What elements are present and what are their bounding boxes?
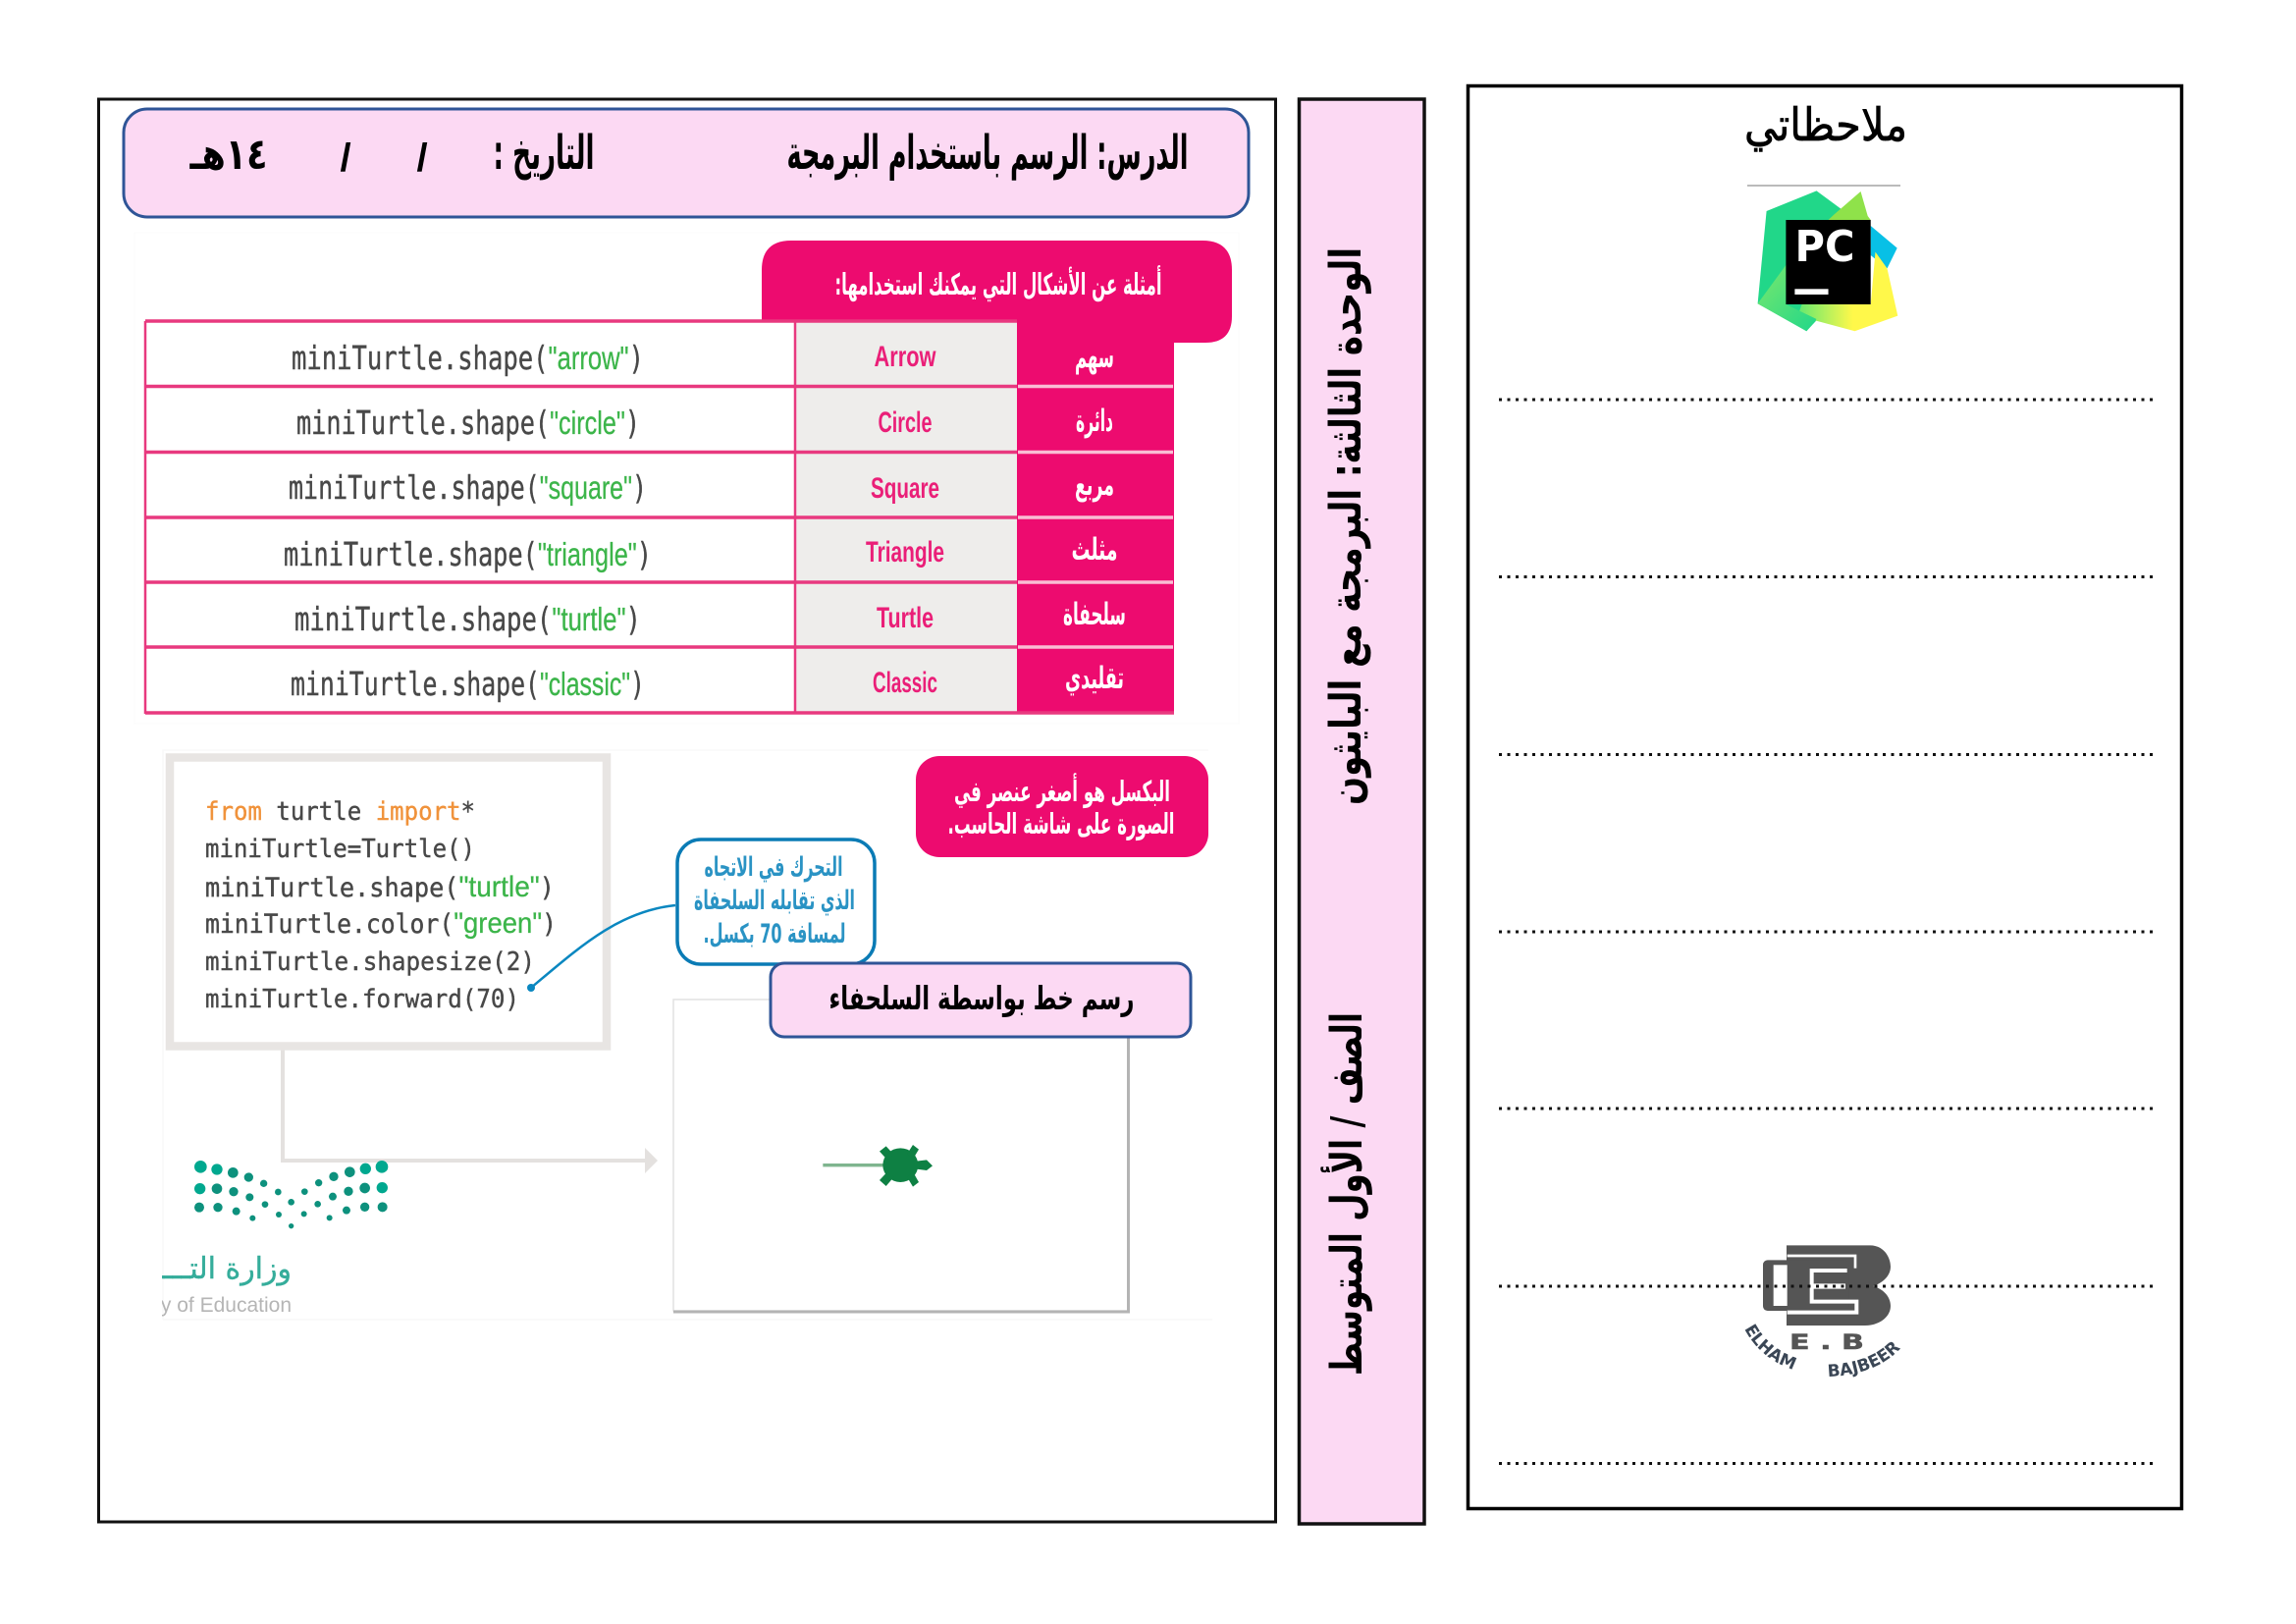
row: triangle: مثلث [1072,532,1117,568]
row: square: مربع [1075,467,1114,503]
row: turtle [294,597,1126,638]
callout: pixel definition [916,756,1208,857]
row: triangle [284,532,1117,573]
pink arabic column [1017,321,1174,714]
date slash: / [416,136,428,180]
icon: turtle with drawn line [823,1145,933,1187]
panel: code block: miniTurtle.shape("turtle") [205,871,555,903]
row: square: Square [871,472,939,505]
row: classic: miniTurtle.shape("classic") [291,665,645,703]
panel: output window [673,1000,1129,1312]
panel: lesson header bar [124,109,1249,217]
icon: ministry dots logo [194,1161,388,1228]
row: circle: Circle [878,406,933,439]
notes heading: ملاحظاتي [1744,98,1907,152]
grade title: الصف / الأول المتوسط [1320,1012,1372,1376]
callout: pixel definition: الصورة على شاشة الحاسب. [948,807,1174,840]
panel: code block: miniTurtle.forward(70) [205,985,519,1014]
row: classic [291,661,1124,703]
row: arrow: Arrow [874,341,936,373]
icon: PyCharm logo [1758,190,1897,331]
callout: move forward description: لمسافة 70 بكسل. [703,919,846,949]
heading rule [1747,185,1900,187]
callout: move forward description: التحرك في الاتجاه [705,852,842,883]
table tab heading: أمثلة عن الأشكال التي يمكنك استخدامها: [834,265,1162,302]
unit title: الوحدة الثالثة: البرمجة مع البايثون [1321,247,1371,805]
panel: shapes table [134,233,1239,724]
row: square [289,467,1114,507]
panel: notes [1467,84,2183,1510]
row: circle: miniTurtle.shape("circle") [296,404,640,442]
panel: code block: from turtle import* [205,797,475,827]
date slash: / [340,136,351,180]
row: turtle: miniTurtle.shape("turtle") [294,600,641,638]
column separators in pink cells [1018,387,1173,647]
panel: code block: miniTurtle.color("green") [205,907,557,940]
grey english column [795,322,1017,713]
row: triangle: miniTurtle.shape("triangle") [284,535,652,573]
row: arrow: miniTurtle.shape("arrow") [292,339,644,377]
row: arrow [292,339,1114,377]
panel: code block [170,758,607,1047]
panel: code block: miniTurtle=Turtle() [205,835,475,864]
row: classic: تقليدي [1065,661,1124,696]
icon: E.B logo: E . B [1789,1330,1864,1354]
callout connector [527,905,675,992]
date label: التاريخ : [493,126,595,181]
hijri year: ١٤هـ [189,130,267,180]
row: arrow: سهم [1075,340,1114,375]
panel: main lesson sheet [98,99,1276,1522]
writing lines [1499,400,2154,1463]
lesson title: الدرس: الرسم باستخدام البرمجة [787,126,1188,181]
ministry name clipped: y of Education [161,1294,292,1317]
table tab heading [762,241,1232,343]
row: square: miniTurtle.shape("square") [289,468,647,507]
panel: code block: miniTurtle.shapesize(2) [205,947,535,977]
icon: E.B logo: BAJBEER [1828,1341,1900,1377]
row: classic: Classic [873,667,937,699]
row: triangle: Triangle [866,536,944,568]
row: turtle: سلحفاة [1063,597,1126,632]
icon: PyCharm logo: PC [1794,222,1855,272]
panel: side strip with unit and grade [1300,99,1424,1524]
ministry name clipped [162,1255,291,1316]
panel: faint example background [163,750,1212,1320]
callout: move forward description [677,839,875,964]
row: turtle: Turtle [877,602,934,634]
callout: move forward description: الذي تقابله السلحفاة [694,886,855,916]
table rules [145,321,1174,714]
arrow: code to output [283,1050,658,1173]
panel: drawing title [771,963,1191,1037]
ministry name clipped: وزارة التــــــــ [120,1252,292,1286]
icon: E.B logo: ELHAM [1745,1324,1796,1370]
row: circle: دائرة [1076,404,1113,439]
row: circle [296,404,1113,442]
icon: E.B logo [1745,1245,1900,1377]
panel: drawing title: رسم خط بواسطة السلحفاء [828,979,1135,1018]
callout: pixel definition: البكسل هو أصغر عنصر في [954,773,1170,808]
